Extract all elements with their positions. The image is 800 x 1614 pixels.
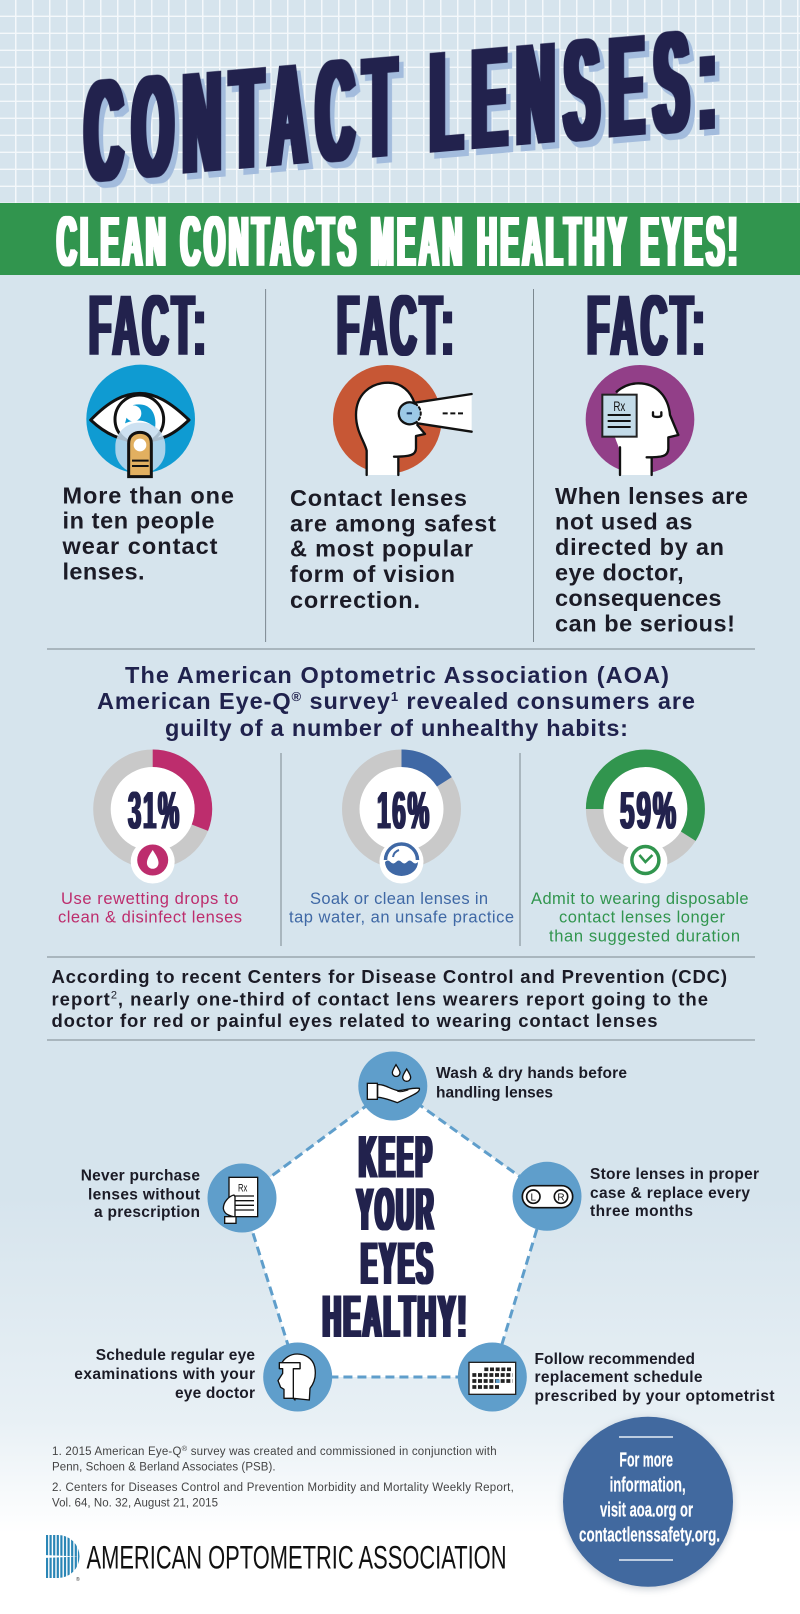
panel: fact 3 [555,278,748,637]
heading: AOA survey: ® [292,689,302,704]
text: fact 1 [62,482,234,584]
callout: more information: contactlenssafety.org. [579,1525,720,1547]
callout: more information: visit aoa.org or [600,1500,693,1522]
label: prescription: Never purchase [81,1168,200,1185]
icon: drop [131,840,175,884]
icon: tap water bowl [380,840,424,884]
panel: stat 59 percent [531,758,749,946]
text: fact 3 [555,483,748,637]
caption: disposable lenses [531,890,749,946]
text block: CDC report: , nearly one-third of contact lens wearers report going to the [118,988,708,1010]
caption: disposable lenses: Admit to wearing disposable [531,890,749,908]
heading: AOA survey: revealed consumers are [399,688,695,714]
icon: lens case: R [557,1192,565,1203]
donut chart: 16% [351,758,452,860]
footnotes: Vol. 64, No. 32, August 21, 2015 [52,1498,218,1510]
pentagon diagram: keep your eyes healthy: HEALTHY! [323,1283,469,1350]
panel: fact 2 [290,278,496,613]
heading: AOA survey: American Eye-Q [97,688,291,714]
caption: disposable lenses: than suggested duration [549,928,740,946]
panel: stat 59 percent: 59% [620,782,678,840]
pentagon diagram: keep your eyes healthy [74,1052,775,1412]
callout: more information: information, [610,1475,686,1497]
label: wash hands [436,1065,627,1102]
heading: AOA survey: 1 [391,689,398,704]
panel: stat 16 percent: 16% [377,782,431,840]
icon: calendar [458,1342,527,1412]
text: fact 3: can be serious! [555,611,735,637]
caption: rewetting drops: Use rewetting drops to [61,890,238,908]
logo wordmark: AMERICAN OPTOMETRIC ASSOCIATION [86,1539,507,1575]
label: prescription: a prescription [94,1204,200,1221]
icon: clock with check [623,840,667,884]
text block: CDC report: 2 [111,990,117,1002]
logo: American Optometric Association [46,1535,505,1581]
label: replacement schedule: Follow recommended [534,1351,695,1368]
text: fact 2: are among safest [290,511,496,537]
icon: head with prescription: Rx [613,398,625,414]
label: prescription [81,1168,200,1221]
text block: CDC report [52,966,727,1031]
text: fact 2: form of vision [290,561,455,587]
text: fact 3: not used as [555,508,692,534]
footnotes: survey was created and commissioned in conjunction with [187,1446,497,1458]
footnotes: 1. 2015 American Eye-Q [52,1446,181,1458]
label: store lenses [590,1166,759,1220]
label: prescription: lenses without [88,1186,200,1203]
text: fact 3: eye doctor, [555,560,684,586]
icon: eye with contact lens on fingertip [86,365,195,477]
label: wash hands: handling lenses [436,1085,553,1102]
panel: fact 2: FACT: [337,278,457,374]
label: replacement schedule: replacement schedule [534,1369,703,1386]
caption: tap water: tap water, an unsafe practice [289,909,514,927]
callout: more information [563,1417,733,1589]
text block: CDC report: According to recent Centers for Disease Control and Prevention (CDC) [52,966,727,987]
panel: fact 1: FACT: [89,278,209,374]
text: fact 1: More than one [62,482,234,508]
label: eye exams: examinations with your [74,1366,255,1383]
label: store lenses: Store lenses in proper [590,1166,759,1183]
footnotes: ® [182,1444,188,1453]
text: fact 3: When lenses are [555,483,748,509]
text: fact 2: Contact lenses [290,485,467,511]
icon: eye exam head [263,1342,332,1412]
logo mark [46,1535,80,1581]
dashed pentagon [242,1086,547,1377]
caption: rewetting drops [58,890,242,927]
label: store lenses: case & replace every [590,1185,750,1202]
label: replacement schedule: prescribed by your optometrist [534,1388,774,1405]
heading: keep your eyes healthy: YOUR [357,1176,436,1243]
icon: prescription in hand [208,1164,276,1232]
label: wash hands: Wash & dry hands before [436,1065,627,1082]
label: store lenses: three months [590,1203,693,1220]
text: fact 1: lenses. [62,558,144,584]
text: fact 2: correction. [290,587,420,613]
donut chart: 59% [595,758,696,860]
footnotes [52,1444,514,1510]
icon: head with prescription [586,365,694,475]
caption: tap water: Soak or clean lenses in [310,890,488,908]
logo mark: ® [76,1576,80,1583]
text: fact 2: & most popular [290,536,473,562]
icon: head with lens and light beam [333,365,472,475]
icon: lens case: L [531,1192,537,1203]
callout: more information: For more [619,1450,673,1472]
heading: keep your eyes healthy: KEEP [359,1123,434,1190]
heading: AOA survey: survey [302,688,390,714]
text block: CDC report: doctor for red or painful eyes related to wearing contact lenses [52,1010,657,1031]
icon: lens case [512,1162,582,1231]
text: fact 3: directed by an [555,534,724,560]
heading: AOA survey [97,662,695,741]
panel: stat 31 percent [58,758,242,927]
panel: stat 16 percent [289,758,514,927]
panel: stat 31 percent: 31% [128,782,181,840]
text: fact 2 [290,485,496,613]
caption: tap water [289,890,514,927]
text: fact 1: in ten people [62,508,214,534]
label: eye exams: Schedule regular eye [96,1347,255,1364]
heading: keep your eyes healthy [323,1123,469,1350]
icon: washing hands [358,1052,427,1120]
icon: prescription in hand: Rx [238,1182,248,1194]
heading: keep your eyes healthy: EYES [361,1230,435,1297]
footnotes: Penn, Schoen & Berland Associates (PSB). [52,1462,276,1474]
panel: fact 1 [62,278,234,584]
footnotes: 2. Centers for Diseases Control and Prevention Morbidity and Mortality Weekly Report, [52,1482,514,1494]
heading: AOA survey: The American Optometric Association (AOA) [125,662,669,688]
caption: disposable lenses: contact lenses longer [559,909,726,927]
text block: CDC report: report [52,988,110,1010]
text: fact 3: consequences [555,585,722,611]
heading: AOA survey: guilty of a number of unhealthy habits: [165,715,628,741]
label: eye exams [74,1347,255,1402]
caption: rewetting drops: clean & disinfect lenses [58,909,242,927]
label: replacement schedule [534,1351,774,1405]
label: eye exams: eye doctor [175,1385,255,1402]
text: fact 1: wear contact [62,533,218,559]
donut chart: 31% [102,758,203,860]
